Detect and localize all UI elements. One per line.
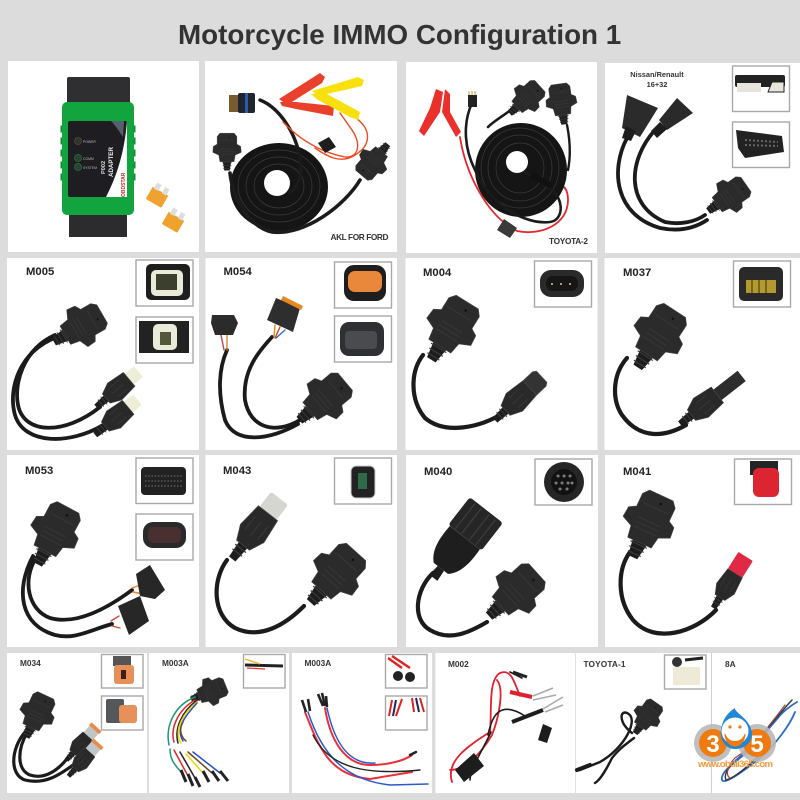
label: M004: M004 — [423, 267, 452, 279]
label: TOYOTA-2: TOYOTA-2 — [549, 236, 588, 246]
icon: connector A — [136, 565, 165, 599]
panel: M005 — [7, 258, 199, 450]
icon: OBD connector — [285, 364, 360, 438]
label: M040: M040 — [424, 466, 452, 478]
panel: M004 — [406, 258, 598, 450]
label: M005: M005 — [26, 266, 54, 278]
icon: OBD connector — [698, 170, 756, 225]
icon: green P002 adapter: ADAPTER — [108, 147, 115, 177]
icon: OBD connector — [609, 485, 685, 568]
inset: orange socket — [334, 262, 392, 308]
panel: Nissan/Renault cable — [605, 63, 800, 253]
cable — [413, 355, 505, 428]
panel: M002, Toyota-1 and 8A row — [436, 653, 800, 793]
inset: green-keyed socket — [334, 458, 392, 504]
lead pins — [302, 693, 327, 712]
icon: green P002 adapter — [61, 77, 135, 237]
icon: green P002 adapter: P002 — [101, 161, 107, 174]
icon: OBD connector — [409, 288, 489, 374]
label: M003A: M003A — [162, 658, 189, 668]
colored wires lower — [170, 749, 220, 778]
inset: round socket — [535, 459, 592, 505]
icon: green P002 adapter: COMM — [83, 157, 94, 161]
inset: orange plug side view — [102, 696, 143, 730]
panel: M003A red-blue leads — [292, 653, 432, 793]
label: TOYOTA-1: TOYOTA-1 — [584, 659, 626, 669]
icon: OBD connector 1 — [499, 75, 550, 125]
label: M043: M043 — [223, 465, 251, 477]
icon: plug — [487, 368, 550, 429]
panel: Toyota-2 cable — [406, 62, 597, 253]
icon: OBD connector — [16, 496, 90, 576]
colored wires — [221, 325, 285, 350]
icon: connector B — [118, 596, 149, 635]
panel: M041 — [605, 455, 800, 647]
watermark: 365 logo: www.obdii365.com — [697, 759, 773, 770]
colored wires upper — [168, 697, 197, 745]
8A wire bundle — [722, 700, 797, 781]
panel: M034 — [7, 653, 147, 793]
icon: OBD connector — [10, 688, 62, 745]
jumper pins — [181, 770, 228, 787]
icon: OBD connector left — [213, 133, 241, 171]
icon: orange plug 1 — [60, 721, 103, 766]
panel: M003A jumper harness — [149, 653, 289, 793]
inset: multi-pin socket — [136, 458, 193, 504]
icon: fuses — [146, 182, 187, 233]
inset: multi-pin plug — [136, 514, 193, 560]
label: M034: M034 — [20, 658, 41, 668]
icon: green P002 adapter: POWER — [83, 140, 96, 144]
icon: white plug 2 — [88, 391, 144, 443]
icon: 16-pin connector — [651, 98, 693, 138]
icon: grey-tip plug — [221, 489, 291, 568]
panel: M053 — [7, 455, 199, 647]
icon: small pin connector — [468, 91, 477, 107]
Y cable — [220, 337, 300, 437]
watermark: 365 logo: 3 — [706, 731, 720, 758]
Y cable — [618, 130, 707, 230]
icon: orange plug 2 — [62, 737, 105, 782]
panel: M054 — [206, 258, 397, 450]
Y cable — [13, 335, 103, 439]
icon: orange-capped connector — [267, 296, 303, 332]
cable — [418, 573, 487, 635]
icon: yellow clamp — [311, 77, 364, 120]
icon: OBD connector — [623, 695, 668, 742]
icon: green P002 adapter: SYSTEM — [83, 166, 97, 170]
panel: adapter — [8, 61, 199, 252]
label: M002: M002 — [448, 659, 469, 669]
cable — [615, 358, 686, 434]
inset: harness — [244, 654, 285, 688]
panel: M037 — [604, 258, 800, 450]
icon: 32-pin connector — [622, 95, 658, 141]
icon: red-tip plug — [705, 551, 754, 614]
inset: 3-pin plug — [534, 261, 592, 307]
panel: M040 — [406, 455, 598, 647]
icon: round 10-pin connector — [417, 497, 503, 591]
inset: white connector — [732, 66, 790, 112]
inset: 4-pin plug — [136, 317, 193, 363]
icon: fuse — [497, 219, 517, 238]
Toyota-1 cable — [577, 713, 634, 783]
label: M037: M037 — [623, 267, 651, 279]
inset: orange socket — [102, 654, 143, 688]
inset: clip connectors — [386, 654, 427, 688]
watermark: 365 logo: 5 — [750, 731, 764, 758]
icon: red clamp — [279, 73, 334, 116]
title: Motorcycle IMMO Configuration 1 — [178, 19, 621, 50]
inset: leads — [386, 696, 427, 730]
icon: OBD connector 2 — [543, 82, 580, 127]
cable coil — [230, 100, 360, 232]
label: M053: M053 — [25, 465, 53, 477]
inset: 6-pin plug — [136, 260, 193, 306]
cable — [217, 560, 304, 632]
inset: white connector — [664, 655, 706, 689]
icon: black pendant plug — [538, 724, 552, 743]
inset: OBD socket — [732, 122, 790, 168]
icon: OBD connector — [186, 672, 231, 713]
cable coil — [466, 103, 570, 222]
icon: OBD connector — [473, 554, 554, 634]
label: M041: M041 — [623, 466, 651, 478]
icon: OBD connector right — [350, 134, 400, 185]
Y cable — [23, 556, 132, 636]
wires: orange-red fused leads — [283, 113, 368, 159]
inset: yellow-pin plug — [734, 261, 790, 307]
inset: red socket — [734, 459, 792, 504]
icon: red clip — [510, 688, 556, 700]
label: 8A: 8A — [725, 659, 736, 669]
M002 battery cable — [450, 672, 527, 782]
label: M054: M054 — [224, 266, 252, 278]
panel: AKL for Ford cable — [205, 61, 400, 252]
icon: green P002 adapter: OBDSTAR — [121, 172, 127, 197]
leads — [305, 708, 428, 785]
panel: M043 — [206, 455, 397, 647]
icon: OBD connector — [291, 535, 375, 620]
label: AKL FOR FORD: AKL FOR FORD — [330, 232, 388, 242]
icon: plug — [673, 366, 749, 434]
icon: ring connector — [229, 93, 255, 113]
colored wires — [111, 584, 144, 628]
watermark: 365 logo — [694, 708, 776, 770]
label: Nissan/Renault 16+32: Nissan/Renault — [630, 70, 684, 79]
Y cable — [14, 732, 77, 781]
icon: black clip — [512, 697, 563, 722]
icon: OBD connector — [43, 295, 113, 360]
label: Nissan/Renault 16+32: 16+32 — [647, 80, 667, 89]
icon: black connector — [211, 315, 238, 335]
cable — [621, 552, 716, 634]
icon: red clamp — [419, 89, 461, 137]
label: M003A: M003A — [304, 658, 331, 668]
icon: OBD connector — [616, 296, 697, 382]
inset: grey socket — [334, 316, 392, 362]
red wire — [460, 137, 568, 232]
icon: white plug 1 — [89, 363, 145, 415]
